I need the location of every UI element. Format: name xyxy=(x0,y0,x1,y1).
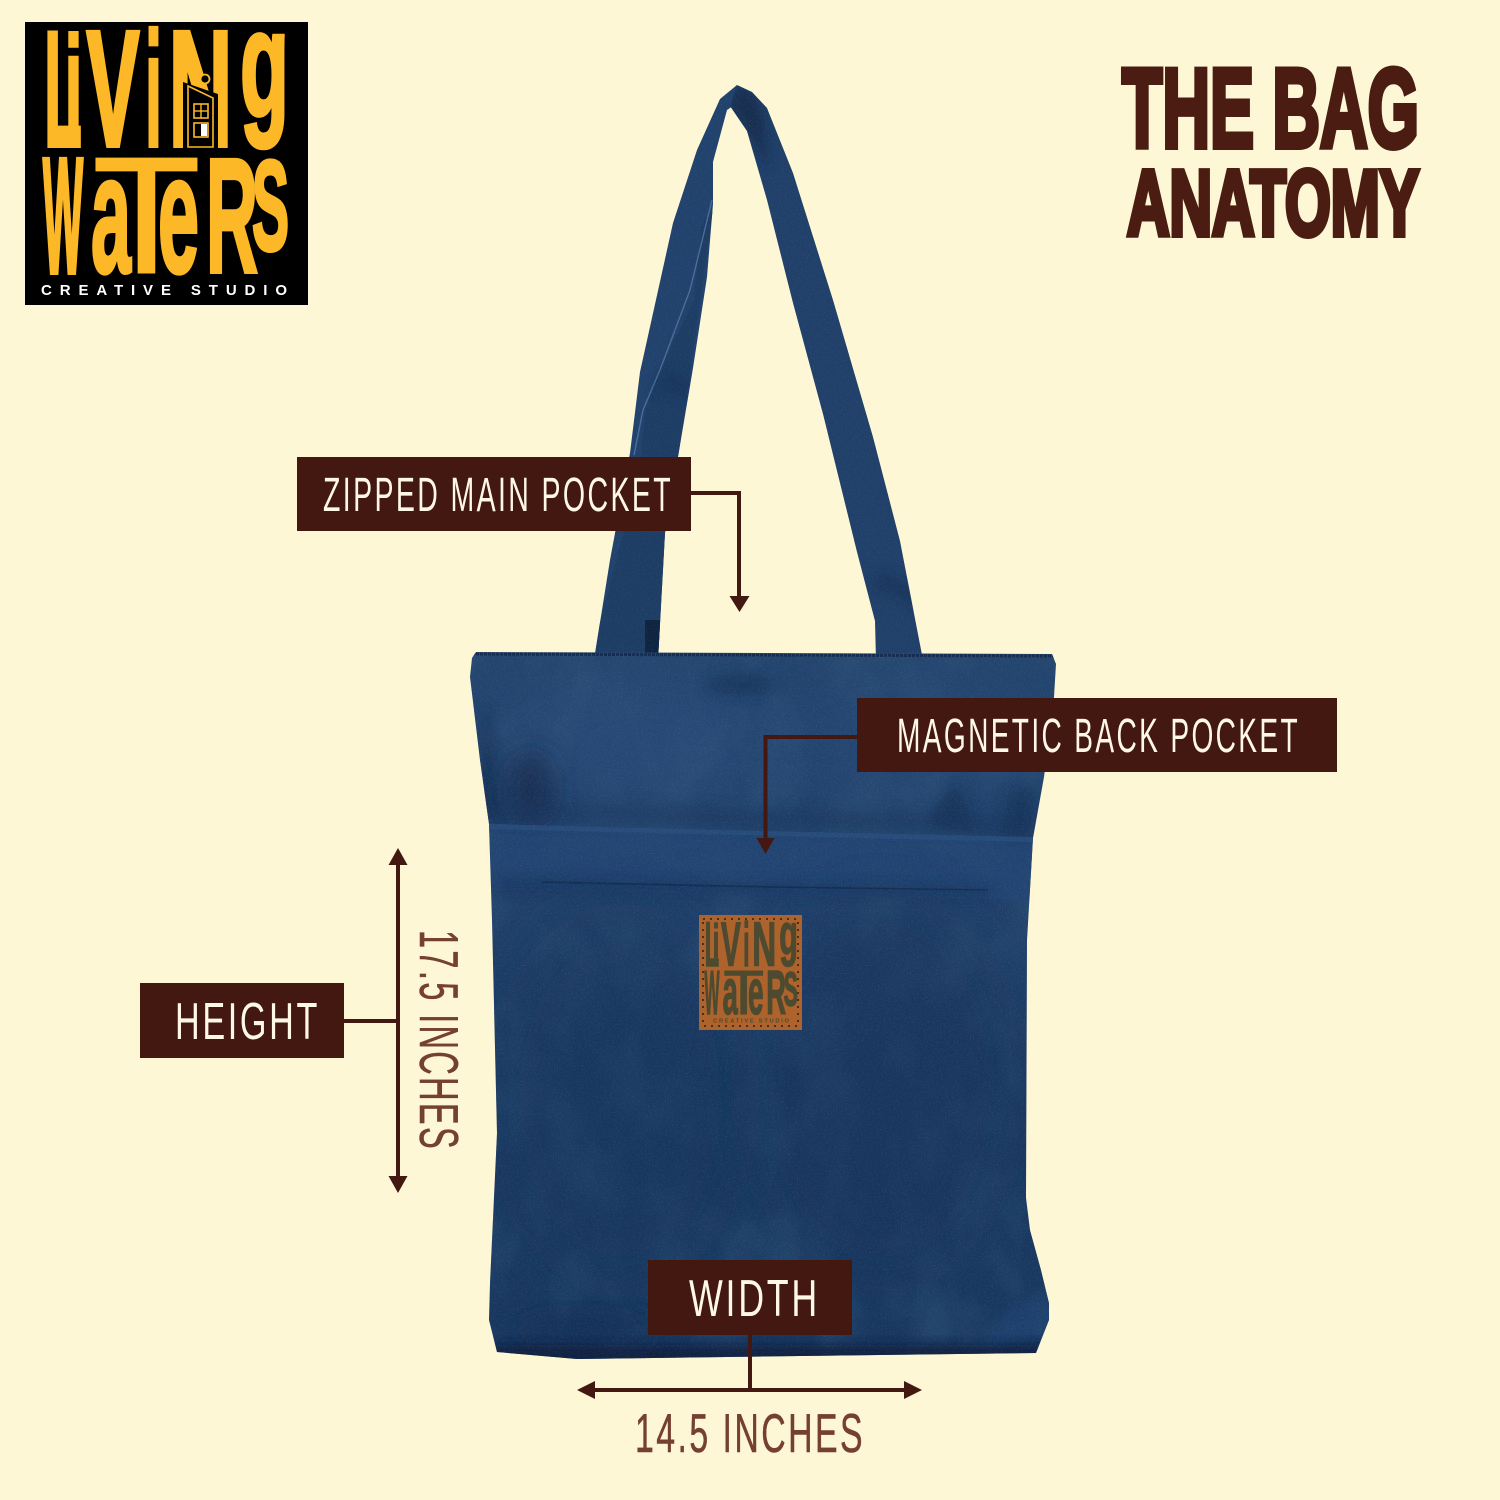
callout: width: WIDTH xyxy=(689,1270,820,1328)
leather patch: W xyxy=(704,959,720,1028)
arrow: width dimension xyxy=(577,1335,922,1399)
icon: house in the N xyxy=(183,74,218,150)
logo: Living Waters Creative Studio: L xyxy=(44,0,82,181)
label: 17.5 inches: 17.5 INCHES xyxy=(408,930,470,1151)
leather patch: R xyxy=(766,959,786,1028)
logo: Living Waters Creative Studio: e xyxy=(158,120,199,308)
leather patch: e xyxy=(748,956,764,1028)
logo: Living Waters Creative Studio: R xyxy=(206,124,258,307)
arrow: height dimension xyxy=(344,848,408,1193)
arrow: zipped main pocket xyxy=(691,493,750,612)
callout: width xyxy=(648,1260,852,1335)
left handle strap xyxy=(595,85,737,653)
logo: Living Waters Creative Studio: a xyxy=(91,120,132,308)
callout: zipped main pocket: ZIPPED MAIN POCKET xyxy=(323,469,673,522)
leather patch: CREATIVE STUDIO xyxy=(713,1019,790,1025)
leather patch xyxy=(699,904,802,1030)
arrow: magnetic back pocket xyxy=(756,737,857,854)
leather patch: T xyxy=(723,958,764,1028)
leather patch: a xyxy=(723,956,738,1028)
callout: zipped main pocket xyxy=(297,457,691,531)
logo: Living Waters Creative Studio xyxy=(25,0,308,309)
leather patch: i xyxy=(713,916,719,969)
tote bag xyxy=(460,80,1070,1365)
callout: magnetic back pocket xyxy=(857,698,1337,772)
front pocket panel xyxy=(489,824,1033,900)
logo: Living Waters Creative Studio: CREATIVE STUDIO xyxy=(41,282,287,299)
logo: Living Waters Creative Studio: W xyxy=(43,124,83,307)
logo: Living Waters Creative Studio: V xyxy=(87,0,139,180)
leather patch: S xyxy=(784,963,798,1017)
logo: Living Waters Creative Studio: i xyxy=(65,12,82,151)
leather patch: i xyxy=(743,911,750,980)
logo: Living Waters Creative Studio: S xyxy=(252,135,289,278)
label: 14.5 inches: 14.5 INCHES xyxy=(635,1402,865,1464)
title: The Bag Anatomy xyxy=(1122,46,1419,255)
leather patch: N xyxy=(752,911,776,980)
callout: height xyxy=(140,983,344,1058)
leather patch: L xyxy=(705,910,719,980)
logo: Living Waters Creative Studio: T xyxy=(92,123,201,309)
leather patch: V xyxy=(721,911,741,980)
bag body with fabric shading xyxy=(460,645,1070,1365)
callout: height: HEIGHT xyxy=(175,993,320,1051)
leather patch: g xyxy=(779,904,798,968)
logo: Living Waters Creative Studio: i xyxy=(145,0,162,181)
right handle strap xyxy=(725,80,930,665)
logo: Living Waters Creative Studio: N xyxy=(169,0,232,180)
